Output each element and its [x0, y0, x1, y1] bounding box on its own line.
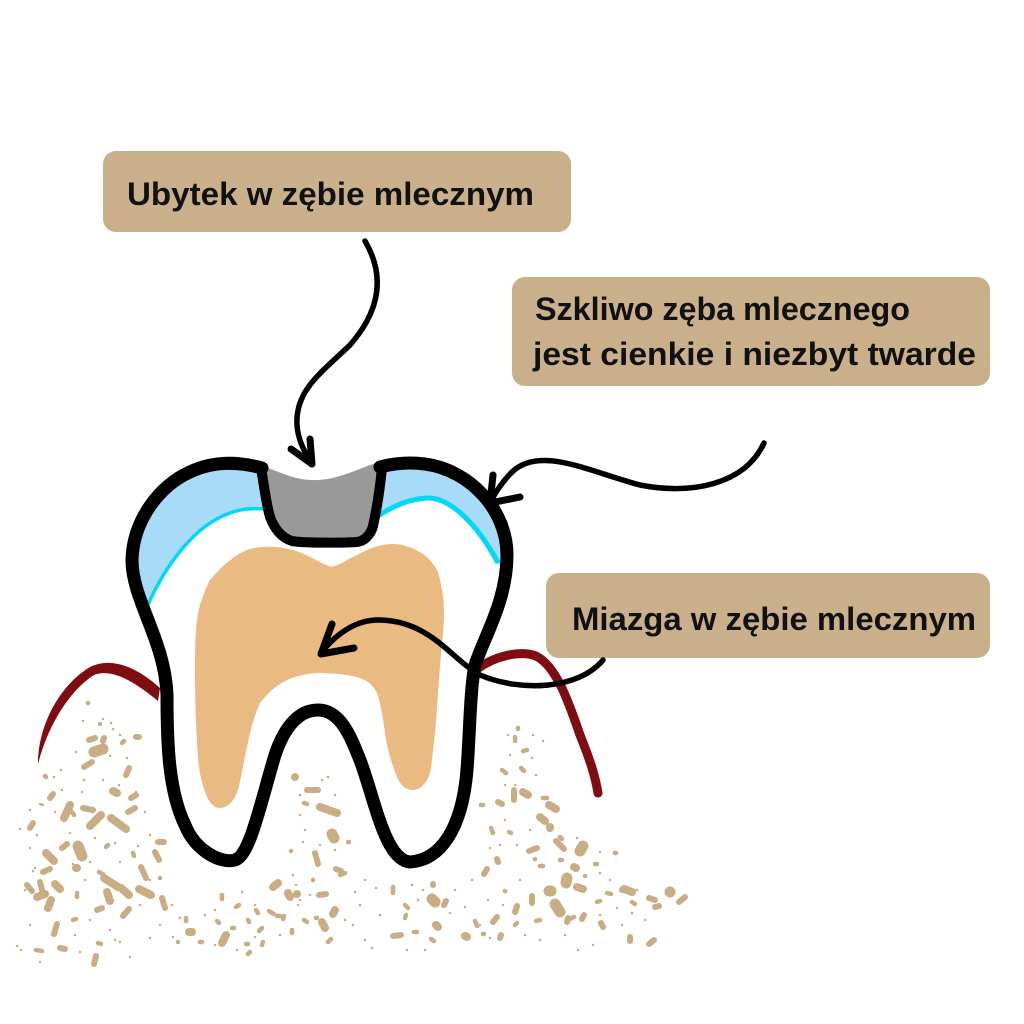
- arrow: to pulp: [321, 620, 603, 686]
- bone speckle texture: [17, 703, 685, 964]
- label box: cavity: Ubytek w zębie mlecznym: [127, 176, 534, 212]
- label box: pulp: Miazga w zębie mlecznym: [572, 601, 976, 637]
- label box: enamel: [512, 277, 990, 386]
- arrow: to cavity: [291, 241, 377, 464]
- pulp: [195, 544, 444, 808]
- cavity outline: [261, 468, 382, 543]
- gum line: right: [477, 654, 598, 793]
- tooth body fill: [132, 463, 507, 862]
- tooth: [132, 463, 507, 862]
- arrow: to enamel: [490, 443, 764, 503]
- label box: enamel: jest cienkie i niezbyt twarde: [532, 336, 976, 372]
- gum line: left: [38, 663, 160, 764]
- tooth outline: [132, 463, 507, 862]
- label box: pulp: [546, 573, 990, 658]
- label box: enamel: Szkliwo zęba mlecznego: [535, 291, 910, 327]
- label box: cavity: [103, 151, 571, 232]
- dentine boundary: right: [378, 498, 498, 563]
- dentine boundary: left: [146, 509, 266, 609]
- cavity filling: [265, 463, 382, 543]
- enamel: right: [378, 463, 507, 566]
- enamel: left: [132, 463, 268, 610]
